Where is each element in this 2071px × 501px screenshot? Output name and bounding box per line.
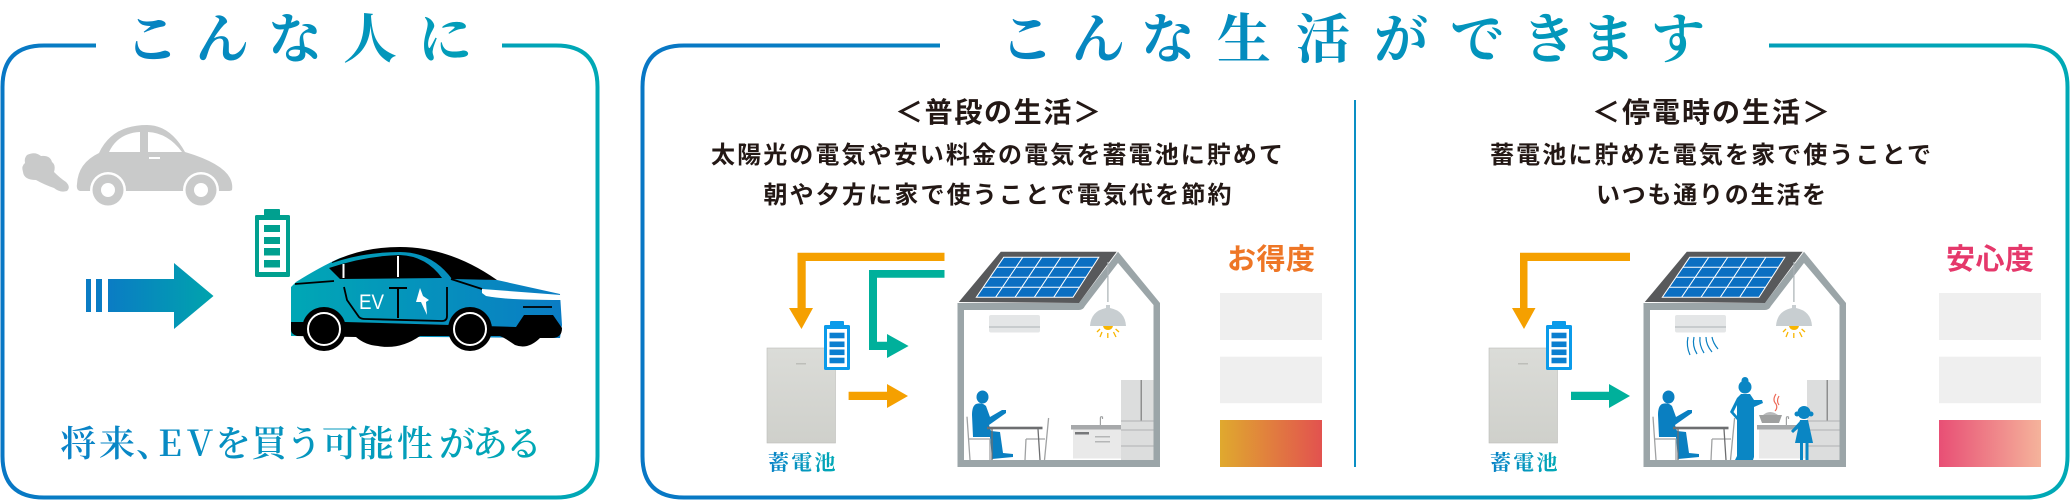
rating bar: peace high <box>1939 420 2041 467</box>
arrow: grid power to battery <box>789 253 944 329</box>
label: savings degree: お得度 <box>1227 243 1315 276</box>
text: blackout description <box>1490 142 1931 209</box>
label: peace of mind degree: 安心度 <box>1946 243 2034 276</box>
icon: teal battery <box>255 209 290 277</box>
house base shifted <box>1644 252 1846 467</box>
label: storage battery: 蓄電池 <box>768 447 836 477</box>
roof <box>959 252 1117 303</box>
panel frame right <box>642 46 2068 498</box>
pendant light <box>1090 262 1126 338</box>
text: future EV purchase: 将来、EVを買う可能性がある <box>60 416 542 467</box>
arrow: battery to home <box>849 384 908 408</box>
child silhouette <box>1791 406 1814 460</box>
panel: target person <box>2 0 598 498</box>
rating bar: savings low <box>1220 293 1322 340</box>
text: blackout description: 蓄電池に貯めた電気を家で使うことで <box>1490 142 1931 169</box>
icon: storage battery unit <box>1489 348 1558 443</box>
arrow: solar power to home <box>869 270 944 358</box>
rating bar: savings mid <box>1220 357 1322 403</box>
kitchen <box>1071 417 1121 458</box>
text: everyday description: 朝や夕方に家で使うことで電気代を節約 <box>764 182 1232 209</box>
EV label on car: EV <box>359 291 384 314</box>
divider <box>1354 100 1356 467</box>
cool air from air conditioner <box>1687 337 1718 355</box>
icon: EV car <box>291 247 562 351</box>
house shell <box>958 252 1160 467</box>
icon: gray gasoline car with smoke <box>22 125 232 208</box>
icon: blue battery <box>1546 321 1572 370</box>
heading: everyday life: ＜普段の生活＞ <box>895 97 1101 128</box>
woman silhouette <box>1730 377 1763 460</box>
text: blackout description: いつも通りの生活を <box>1596 182 1826 209</box>
arrow: grid power to battery <box>1512 253 1630 329</box>
solar panel <box>976 257 1099 297</box>
refrigerator <box>1121 380 1154 460</box>
column: everyday life <box>711 97 1322 477</box>
table and chairs <box>967 417 1049 460</box>
rating bar: savings high <box>1220 420 1322 467</box>
illustration: house everyday <box>958 252 1160 467</box>
column: blackout life <box>1489 97 2041 477</box>
man silhouette <box>972 390 1013 459</box>
icon: blue battery <box>824 321 850 370</box>
text: everyday description: 太陽光の電気や安い料金の電気を蓄電池に貯めて <box>711 142 1283 169</box>
air conditioner <box>989 315 1040 332</box>
label: storage battery: 蓄電池 <box>1490 447 1558 477</box>
panel: lifestyle <box>642 0 2068 498</box>
rating bar: peace low <box>1939 293 2041 340</box>
rating bar: peace mid <box>1939 357 2041 403</box>
illustration: house blackout <box>1644 252 1846 467</box>
arrow: gas car to EV <box>86 263 214 329</box>
icon: storage battery unit <box>767 348 836 443</box>
panel frame left <box>2 46 598 498</box>
arrow: battery to home <box>1571 384 1630 408</box>
cooking pot and steam <box>1759 394 1782 423</box>
text: everyday description <box>711 142 1283 209</box>
heading: blackout life: ＜停電時の生活＞ <box>1592 97 1830 128</box>
